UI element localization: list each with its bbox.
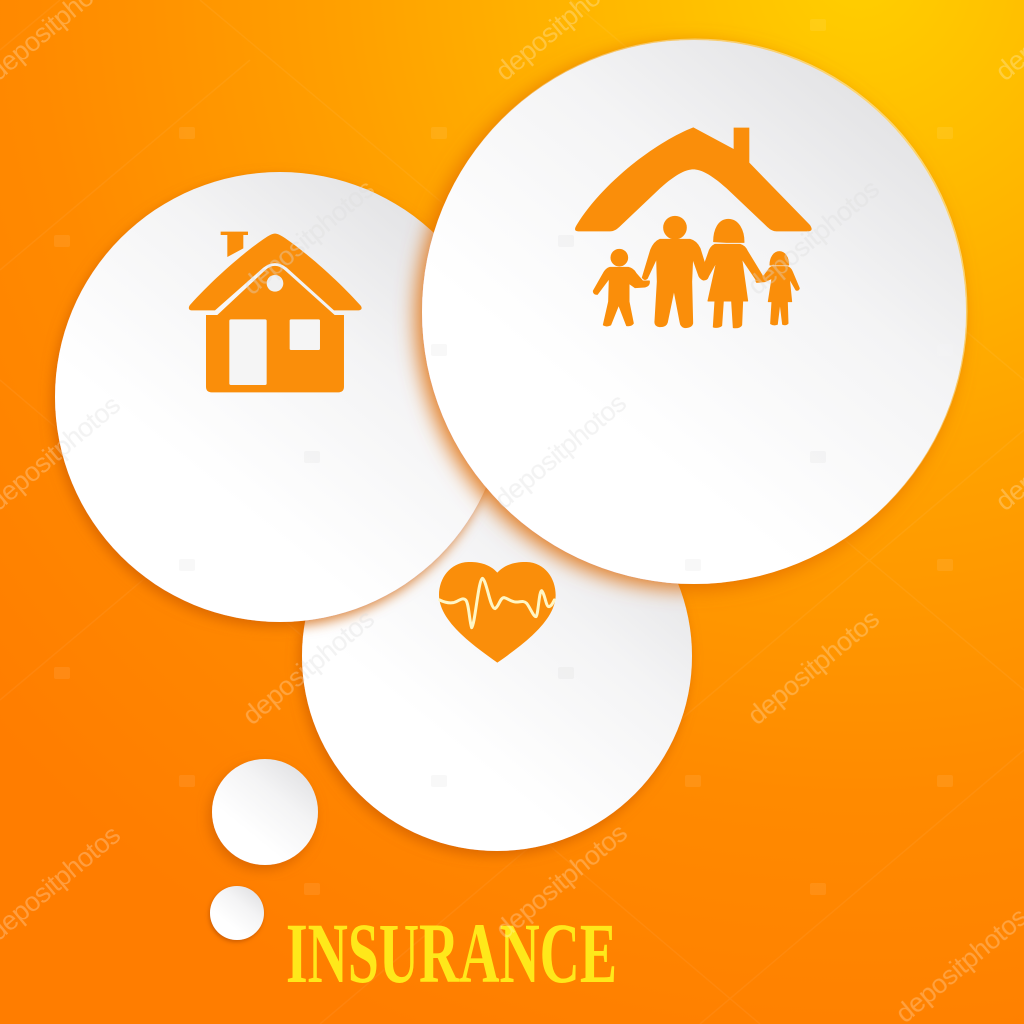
house roof xyxy=(189,234,362,310)
watermark camera marks on paper xyxy=(179,235,826,787)
watermarks on paper: depositphotos xyxy=(742,174,885,301)
icon: heart with pulse xyxy=(439,562,556,663)
watermarks: depositphotos xyxy=(489,388,632,515)
watermarks: depositphotos xyxy=(237,174,380,301)
circle: top right, family xyxy=(422,40,966,584)
watermark camera marks on background xyxy=(54,19,953,895)
girl xyxy=(756,252,799,325)
boy xyxy=(593,249,649,326)
house window xyxy=(290,319,320,350)
house chimney xyxy=(221,232,248,257)
thought bubble: medium xyxy=(212,759,318,865)
house body xyxy=(206,266,344,392)
circle: bottom, health xyxy=(302,461,692,851)
heart shape xyxy=(439,562,556,663)
father xyxy=(642,216,708,328)
icon: house xyxy=(189,232,362,392)
mother xyxy=(700,219,764,328)
watermarks on paper: depositphotos xyxy=(237,174,380,301)
watermarks: depositphotos xyxy=(490,818,633,945)
family roof xyxy=(575,127,812,231)
watermarks on paper xyxy=(60,184,879,681)
house round attic window xyxy=(267,275,283,292)
pulse line xyxy=(440,578,554,628)
title: INSURANCE xyxy=(286,905,617,1001)
watermarks on paper: depositphotos xyxy=(237,604,380,731)
watermarks: depositphotos xyxy=(237,604,380,731)
watermarks: depositphotos xyxy=(742,174,885,301)
watermarks: depositphotos xyxy=(742,604,885,731)
circle: left, home xyxy=(55,172,505,622)
watermarks on paper: depositphotos xyxy=(489,388,632,515)
icon: family under roof xyxy=(575,127,812,328)
circle: top right, family rim xyxy=(422,38,968,584)
house door xyxy=(229,319,267,385)
thought bubble: small xyxy=(210,886,264,940)
